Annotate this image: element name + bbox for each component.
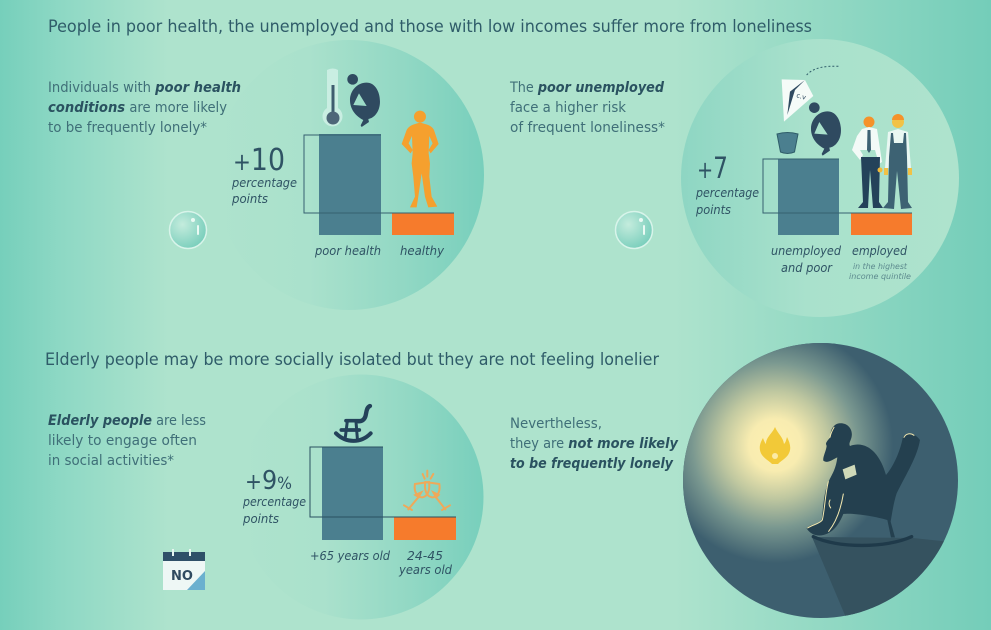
icon: clinking glasses: [404, 471, 450, 510]
label: 24-45 years old: 24-45: [407, 549, 443, 563]
label: percentage points: percentage: [695, 186, 759, 200]
circle background: [214, 40, 484, 310]
label: employed in the highest income quintile: income quintile: [849, 272, 911, 281]
panel: poor health: [48, 40, 484, 310]
icon: paper plane CV: [782, 66, 839, 122]
label: employed in the highest income quintile: in the highest: [853, 262, 908, 271]
text: elderly people: in social activities*: [48, 453, 174, 469]
label: employed in the highest income quintile: [849, 244, 911, 281]
shadow on the floor: [812, 537, 944, 616]
icon: worker in overalls: [883, 114, 912, 209]
icon: crouching person: [347, 74, 380, 127]
text: poor unemployed: The poor unemployed: [509, 80, 665, 96]
bar chart: unemployed vs employed: [695, 151, 912, 281]
title: elderly people: Elderly people may be more socially isolated but they are not feeling lonelier: [45, 350, 659, 370]
panel: poor unemployed: [509, 39, 959, 317]
icon: NO calendar: [163, 549, 205, 590]
icon: flame: [760, 427, 790, 464]
label: percentage points: points: [242, 512, 279, 526]
icon: bubble: [170, 212, 206, 248]
icon: healthy person: [402, 111, 439, 207]
label: unemployed and poor: and poor: [781, 261, 833, 275]
label: percentage points: points: [695, 203, 731, 217]
icon: crouching person: [809, 102, 841, 156]
label: healthy: healthy: [400, 244, 445, 258]
label: percentage points: [242, 495, 306, 526]
icon: bucket: [777, 132, 798, 154]
icon: paper plane CV: c.v: [795, 92, 807, 102]
label: percentage points: percentage: [231, 176, 297, 190]
icon: NO calendar: NO: [171, 569, 193, 584]
text: poor health conditions: Individuals with poor health: [48, 80, 241, 96]
bar chart: poor health vs healthy: [231, 134, 454, 258]
label: unemployed and poor: [771, 244, 841, 275]
circle background: [238, 374, 484, 620]
text: not more likely to be lonely: Nevertheless,: [510, 416, 602, 432]
label: unemployed and poor: unemployed: [771, 244, 841, 258]
text: poor health conditions: to be frequently lonely*: [48, 120, 207, 136]
value: +10: +10: [233, 143, 285, 178]
panel: not more lonely: [510, 343, 958, 618]
text: elderly people: Elderly people are less: [48, 413, 206, 429]
text: not more likely to be lonely: [510, 416, 679, 472]
text: not more likely to be lonely: to be frequently lonely: [510, 456, 674, 472]
icon: bubble: [616, 212, 652, 248]
label: poor health: poor health: [314, 244, 381, 258]
label: 24-45 years old: [398, 549, 452, 577]
value: +9%: +9%: [245, 466, 292, 496]
illustration: elderly man by a flame: [683, 343, 958, 618]
label: percentage points: percentage: [242, 495, 306, 509]
text: not more likely to be lonely: they are not more likely: [510, 436, 679, 452]
title: poor health, unemployed, low incomes: People in poor health, the unemployed and those with low incomes suffer more from loneliness: [48, 17, 812, 37]
circle background: [681, 39, 959, 317]
bar chart: +65 vs 24-45: [242, 447, 456, 577]
label: percentage points: points: [231, 192, 268, 206]
label: employed in the highest income quintile: employed: [852, 244, 907, 258]
old man in rocking chair: [807, 423, 920, 545]
icon: man with tie: [852, 116, 883, 208]
label: percentage points: [695, 186, 759, 217]
label: 24-45 years old: years old: [398, 563, 452, 577]
text: poor unemployed: [509, 80, 665, 136]
icon: rocking chair: [336, 406, 371, 441]
text: poor health conditions: [48, 80, 241, 136]
text: poor unemployed: of frequent loneliness*: [510, 120, 665, 136]
label: +65 years old: +65 years old: [310, 549, 390, 563]
value: +7: +7: [697, 151, 728, 185]
text: elderly people: [48, 413, 206, 469]
label: percentage points: [231, 176, 297, 206]
icon: thermometer: [322, 68, 342, 126]
text: poor health conditions: conditions are more likely: [48, 100, 227, 116]
text: poor unemployed: face a higher risk: [510, 100, 627, 116]
text: elderly people: likely to engage often: [48, 433, 197, 449]
panel: elderly social activities: [48, 374, 484, 620]
